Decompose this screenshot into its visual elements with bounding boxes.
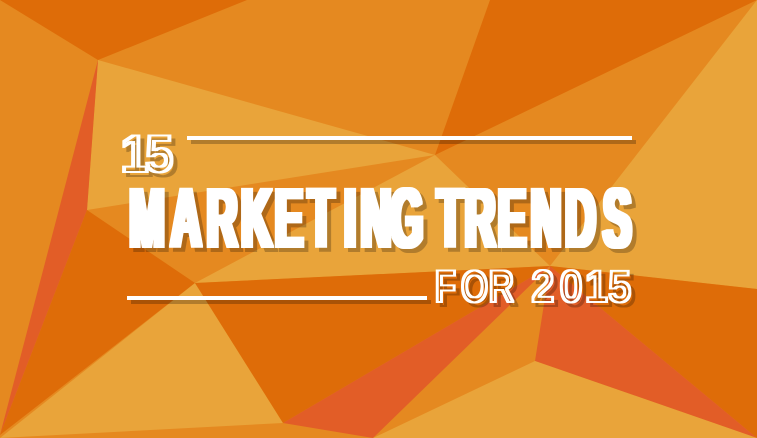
number: 15: 15 bbox=[120, 125, 174, 184]
top rule bbox=[187, 136, 632, 140]
heading: trends: TRENDS bbox=[437, 172, 631, 266]
title block bbox=[120, 125, 632, 312]
bottom rule bbox=[127, 296, 427, 300]
subheading: for: FOR bbox=[434, 261, 514, 312]
subheading: 2015: 2015 bbox=[531, 262, 632, 312]
heading: marketing: MARKETING bbox=[130, 172, 423, 266]
